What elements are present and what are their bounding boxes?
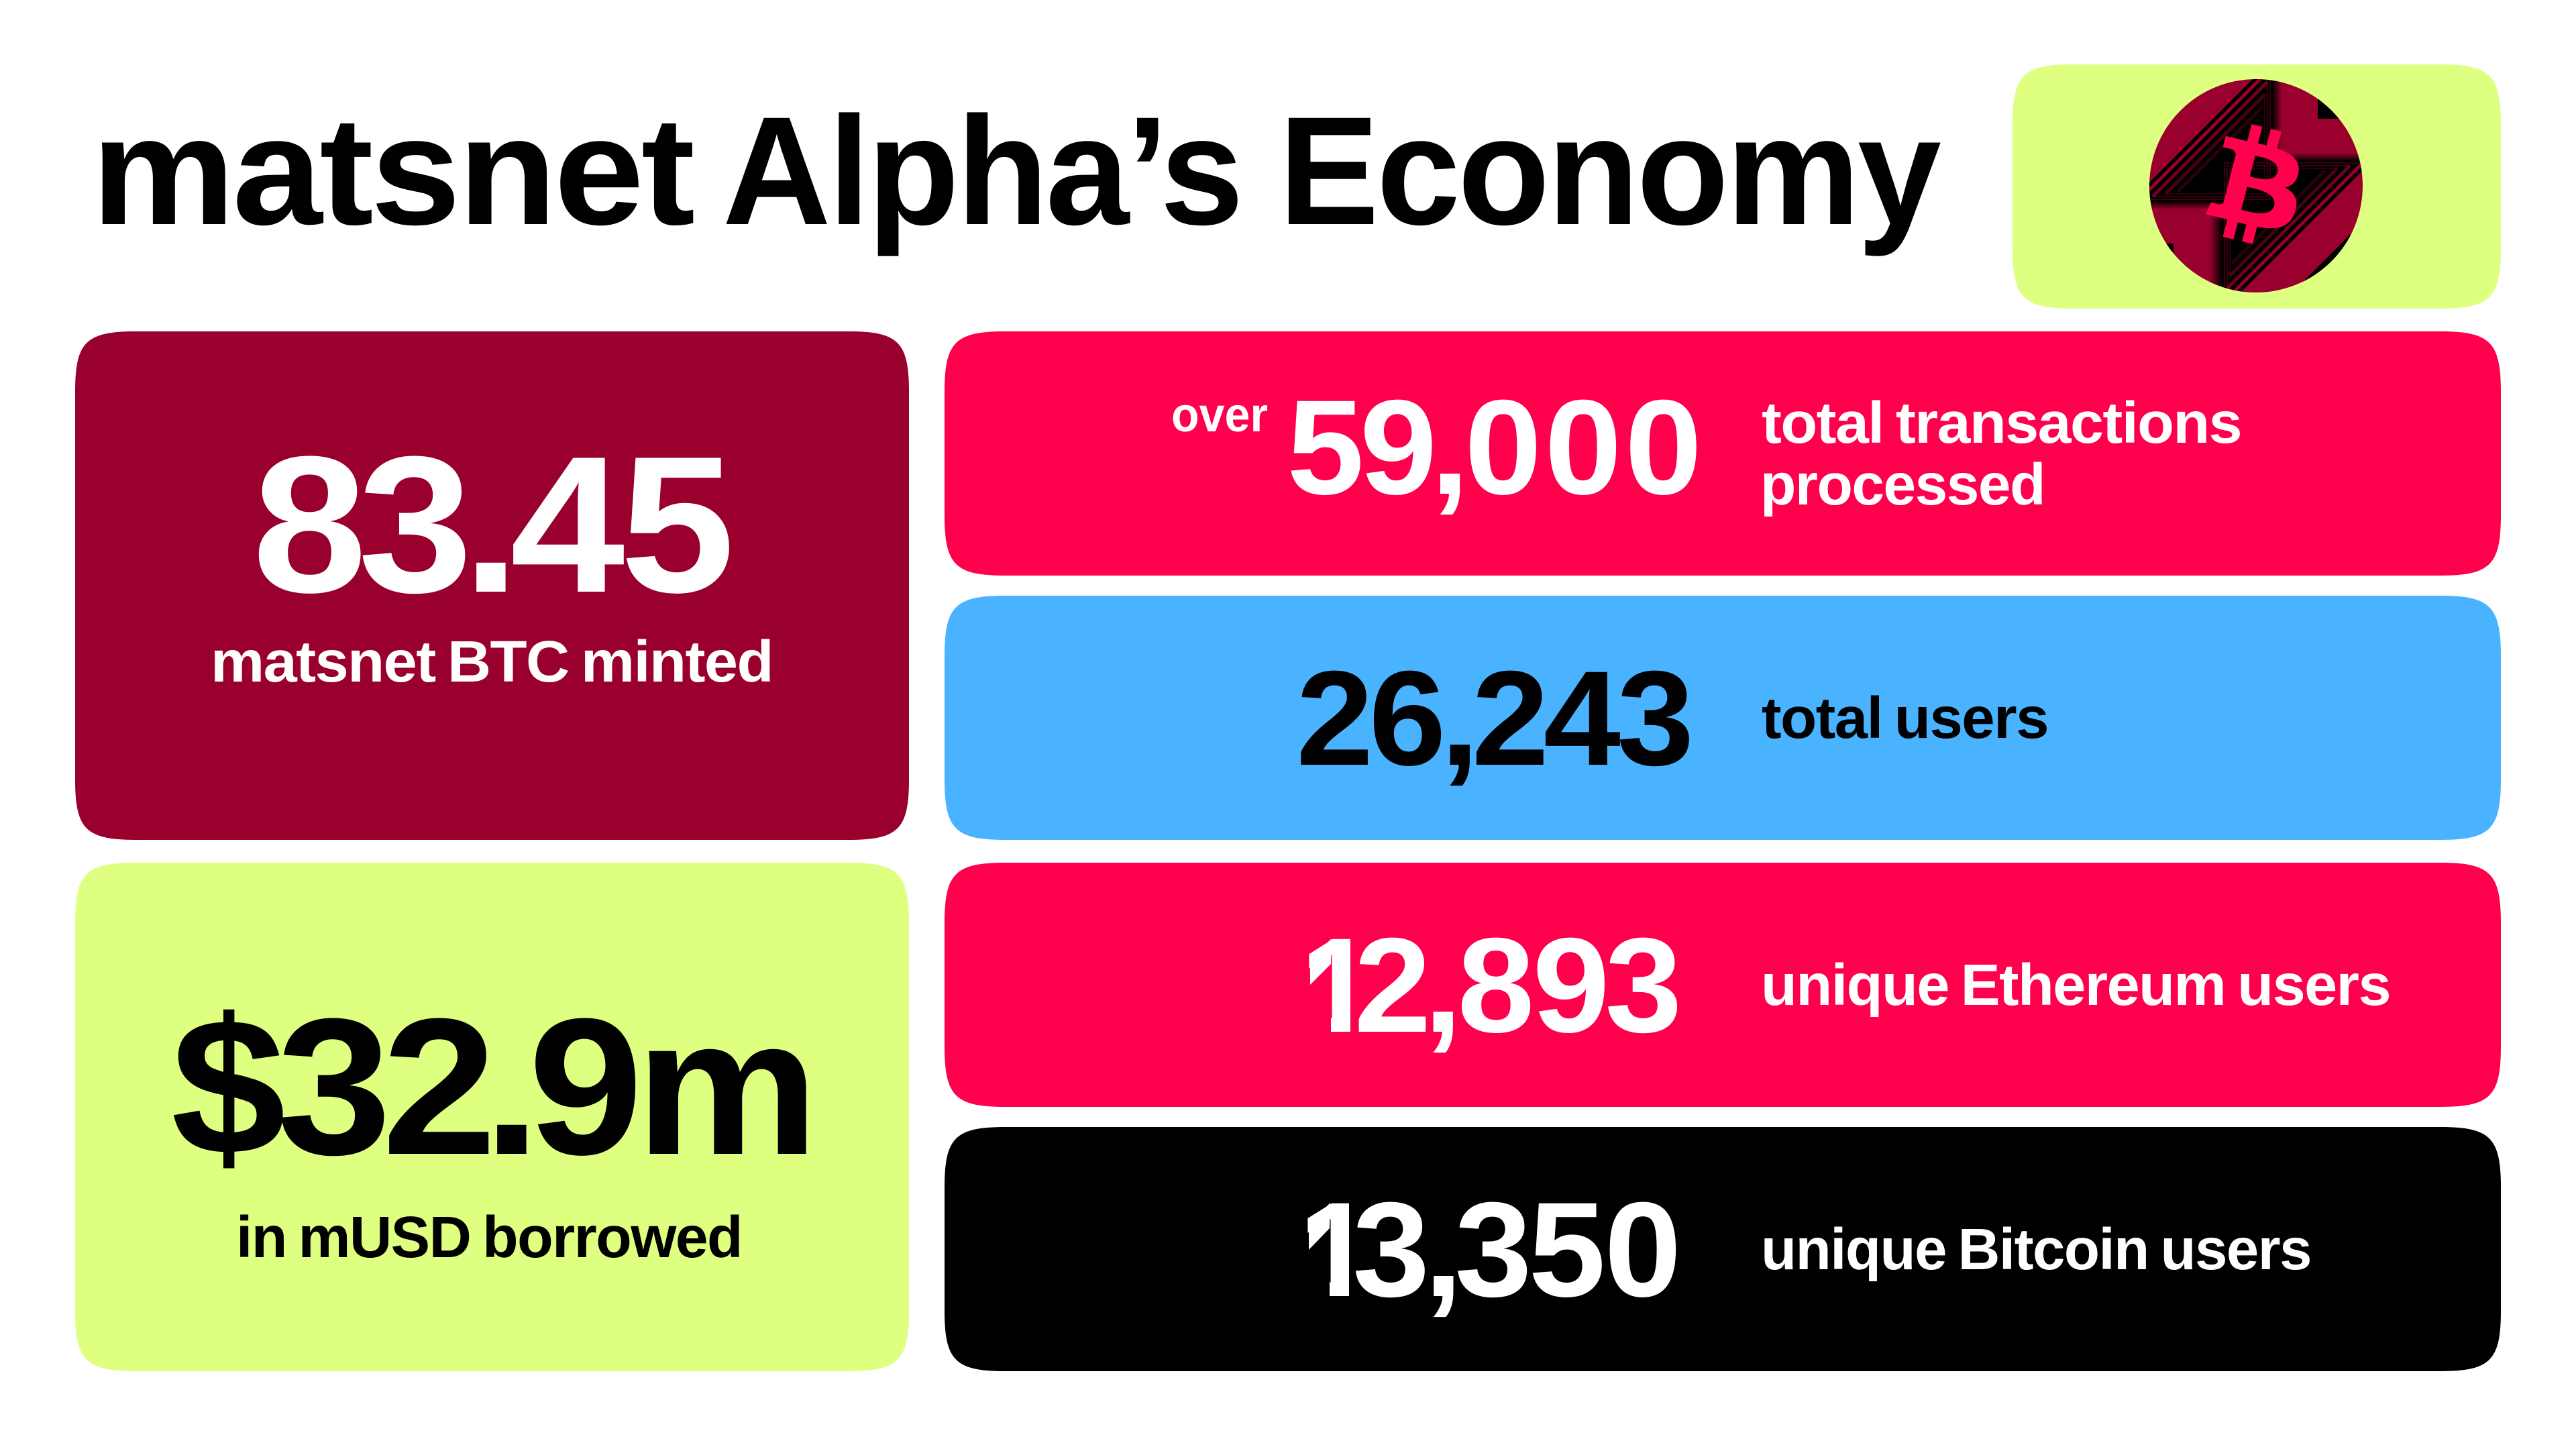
label: unique Ethereum users: unique Ethereum users: [1761, 953, 2390, 1018]
stat: $32.9m: $32.9m: [171, 978, 819, 1195]
label: in mUSD borrowed: in mUSD borrowed: [236, 1205, 742, 1270]
panel: mUSD borrowed: [75, 863, 909, 1371]
stat: 12,893: 1: [1299, 910, 1377, 1061]
title: Economy: [1279, 85, 1941, 257]
label: total users: total users: [1762, 686, 2048, 751]
title: [91, 85, 1941, 257]
label: unique Bitcoin users: unique Bitcoin users: [1761, 1217, 2311, 1282]
stat: 13,350: 3,350: [1352, 1175, 1682, 1325]
label: matsnet BTC minted: matsnet BTC minted: [211, 629, 773, 694]
stat: 13,350: 1: [1298, 1175, 1375, 1325]
panel: unique Ethereum users: [945, 863, 2501, 1107]
label: total transactions processed: processed: [1760, 452, 2045, 517]
stat: 12,893: 2,893: [1354, 910, 1682, 1061]
panel: total users: [945, 596, 2501, 840]
title: Alpha’s: [722, 85, 1241, 257]
icon: bitcoin coin: [2149, 79, 2363, 292]
panel: total transactions: [945, 331, 2501, 576]
label: total transactions processed: [1760, 390, 2241, 517]
panel: BTC minted: [75, 331, 909, 840]
stat: 12,893: [1309, 938, 1677, 1053]
label: total transactions processed: total transactions: [1762, 390, 2241, 455]
stat: 13,350: [1307, 1202, 1676, 1318]
text: over: over: [1171, 388, 1268, 442]
stat: 59,000: 59,000: [1287, 372, 1702, 523]
stat: 83.45: 83.45: [252, 416, 735, 633]
panel: logo badge: [2012, 60, 2501, 311]
icon: bitcoin symbol: [2206, 124, 2299, 244]
stat: 26,243: 26,243: [1296, 643, 1694, 794]
title: matsnet: [91, 85, 693, 257]
panel: unique Bitcoin users: [945, 1127, 2501, 1371]
